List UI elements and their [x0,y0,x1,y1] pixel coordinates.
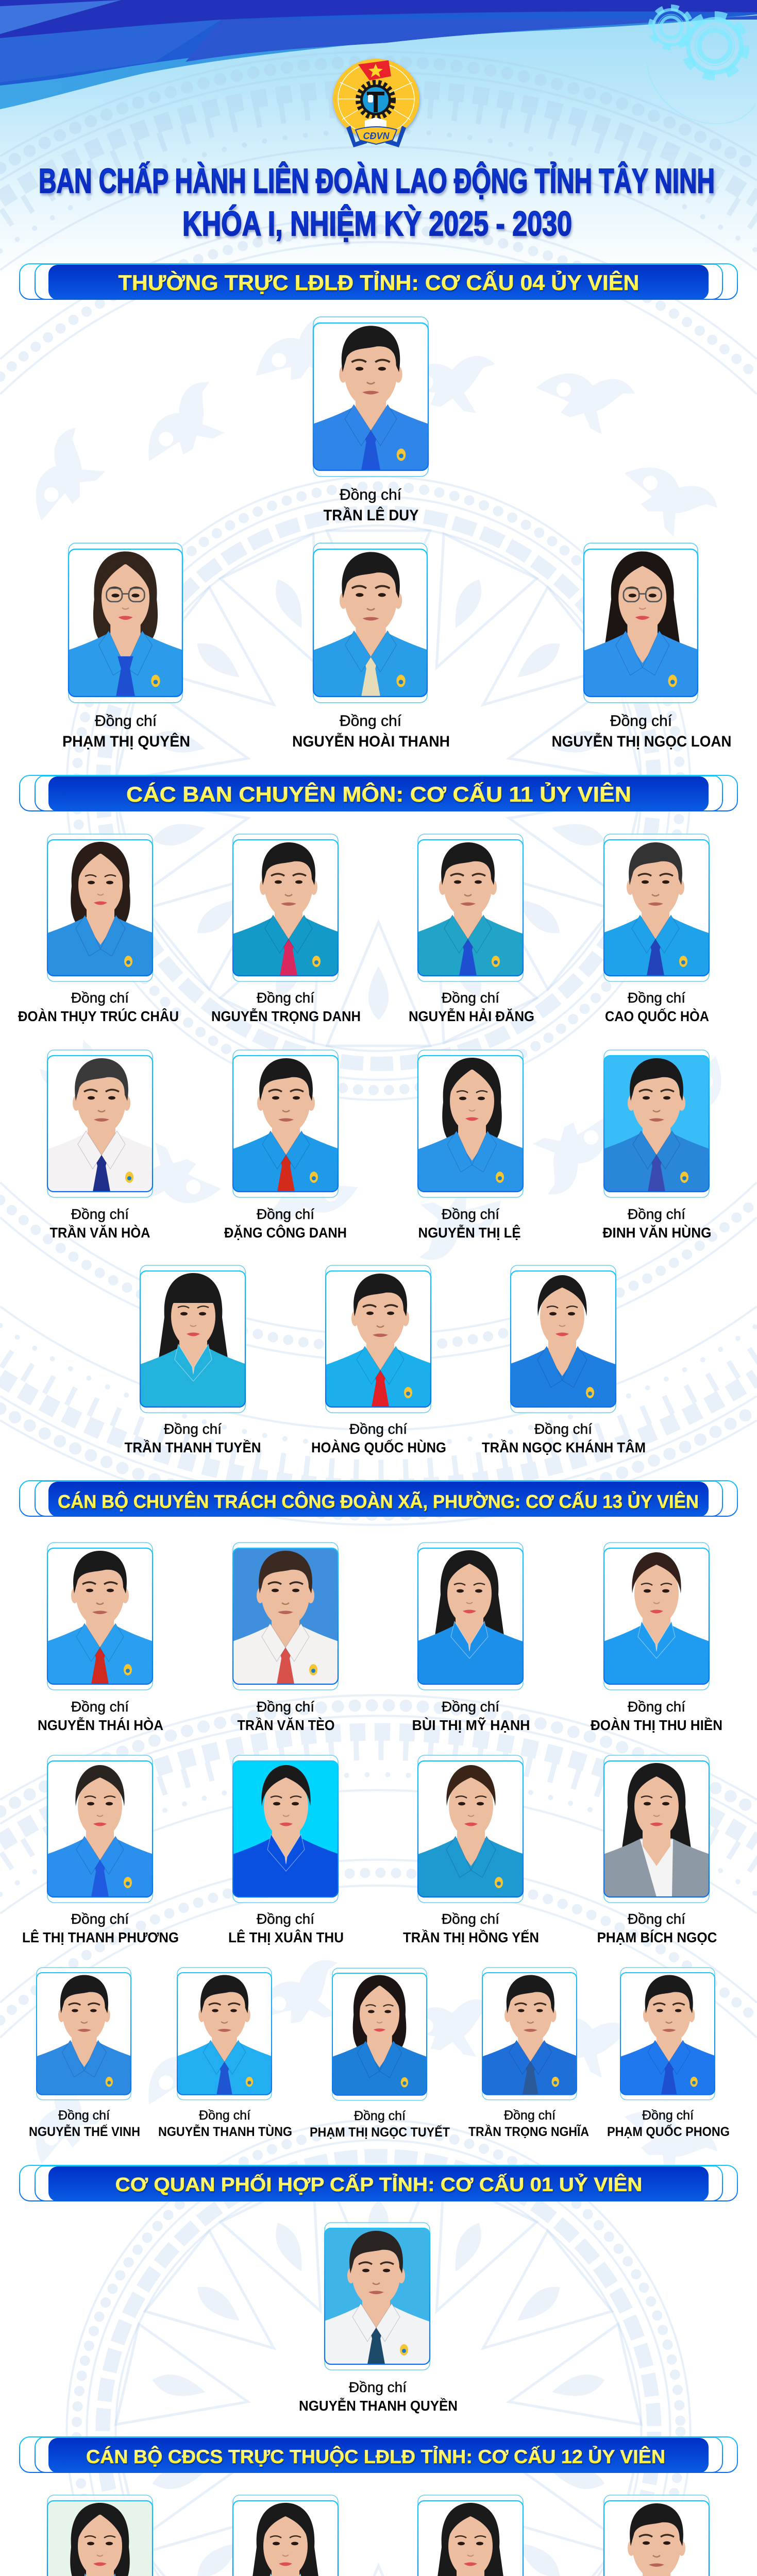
member: Phạm Quốc Phong: Đồng chí [642,2108,694,2123]
member: Bùi Thị Mỹ Hạnh: Đồng chí [442,1699,499,1715]
member: Phạm Thị Quyên [62,543,190,750]
member: Nguyễn Văn Khải [595,2495,719,2576]
member: Nguyễn Thanh Quyền [299,2223,458,2414]
member: Đoàn Thị Thu Hiền: Đồng chí [628,1699,685,1715]
member: Nguyễn Thị Ngọc Loan [551,543,732,750]
member: Trần Thanh Tuyền: Đồng chí [164,1421,222,1437]
member: Trần Văn Hòa: Đồng chí [71,1206,129,1222]
member: Đặng Công Danh: ĐẶNG CÔNG DANH [224,1224,347,1241]
member: Nguyễn Thế Vinh: NGUYỄN THẾ VINH [29,2124,140,2139]
section heading: Cán bộ chuyên trách công đoàn xã, phường [20,1480,737,1517]
member: Nguyễn Trọng Danh: Đồng chí [257,990,314,1006]
member: Nguyễn Thái Hòa: Đồng chí [71,1699,129,1715]
member: Cao Quốc Hòa: Đồng chí [628,990,685,1006]
member: Trần Trọng Nghĩa [468,1968,589,2139]
member: Nguyễn Thanh Tùng: Đồng chí [199,2108,250,2123]
member: Trần Thị Hồng Yến [403,1755,539,1945]
member: Đinh Văn Hùng [599,1050,714,1241]
member: Trần Ngọc Khánh Tâm: TRẦN NGỌC KHÁNH TÂM [482,1439,646,1455]
member: Hoàng Quốc Hùng: Đồng chí [349,1421,407,1437]
member: Hoàng Quốc Hùng [311,1265,446,1455]
member: Nguyễn Hoài Thanh: Đồng chí [340,713,402,730]
member: Lê Thị Thanh Phương [22,1755,179,1945]
member: Phạm Thị Ngọc Tuyết: Đồng chí [354,2109,406,2123]
member: Nguyễn Thế Vinh [29,1968,140,2139]
member: Nguyễn Trọng Danh: NGUYỄN TRỌNG DANH [211,1008,361,1024]
member: Nguyễn Thế Vinh: Đồng chí [58,2108,110,2123]
member: Trần Ngọc Khánh Tâm: Đồng chí [534,1421,592,1437]
member: Lê Thị Xuân Thu [228,1755,344,1945]
section heading: Cơ quan phối hợp cấp tỉnh: CƠ QUAN PHỐI HỢP CẤP TỈNH: CƠ CẤU 01 UỶ VIÊN [115,2173,642,2196]
member: Trần Trọng Nghĩa: TRẦN TRỌNG NGHĨA [468,2124,589,2139]
logo: Công đoàn Việt Nam: CĐVN [363,131,390,141]
member: Trần Thanh Tuyền: TRẦN THANH TUYỀN [125,1439,261,1455]
section heading: Thường trực [20,263,737,300]
member: Lê Thị Xuân Thu: Đồng chí [257,1911,314,1927]
member: Đoàn Thị Thu Hiền: ĐOÀN THỊ THU HIỀN [591,1717,722,1733]
title [39,162,715,243]
member: Nguyễn Thị Lệ: NGUYỄN THỊ LỆ [418,1225,520,1241]
member: Nguyễn Thanh Tùng [158,1968,292,2139]
section heading: Cán bộ CĐCS trực thuộc [20,2436,737,2473]
member: Bùi Thị Mỹ Hạnh [412,1543,530,1733]
member: Đoàn Thụy Trúc Châu: ĐOÀN THỤY TRÚC CHÂU [18,1008,179,1024]
member: Nguyễn Thanh Quyền: Đồng chí [349,2379,407,2395]
member: Trần Văn Tèo: Đồng chí [257,1699,314,1715]
title: KHÓA I, NHIỆM KỲ 2025 - 2030 [182,205,572,243]
logo: Công đoàn Việt Nam [333,59,419,147]
member: Trần Văn Tèo: TRẦN VĂN TÈO [237,1717,335,1733]
member: Hoàng Quốc Hùng: HOÀNG QUỐC HÙNG [311,1439,446,1455]
member: Đoàn Thụy Trúc Châu: Đồng chí [71,990,129,1006]
member: Phan Thị Thu Hiền [405,2495,537,2576]
member: Phạm Thị Ngọc Tuyết: PHẠM THỊ NGỌC TUYẾT [310,2125,450,2140]
member: Trần Lê Duy [308,317,434,524]
member: Trần Lê Duy: TRẦN LÊ DUY [324,506,418,524]
member: Lê Thị Thanh Phương: Đồng chí [71,1911,129,1927]
member: Cao Quốc Hòa [598,834,713,1024]
member: Trần Văn Hòa [44,1050,159,1241]
member: Trần Thị Hồng Yến: TRẦN THỊ HỒNG YẾN [403,1929,539,1945]
member: Trần Thị Hồng Yến: Đồng chí [442,1911,499,1927]
member: Bùi Thị Mỹ Hạnh: BÙI THỊ MỸ HẠNH [412,1717,530,1733]
member: Phạm Thị Ngọc Tuyết [310,1968,450,2140]
member: Phạm Thị Quyên: Đồng chí [95,713,157,730]
section heading: Các ban chuyên môn: CÁC BAN CHUYÊN MÔN: CƠ CẤU 11 ỦY VIÊN [126,782,631,806]
member: Đặng Công Danh: Đồng chí [257,1206,314,1222]
member: Nguyễn Hải Đăng: NGUYỄN HẢI ĐĂNG [409,1008,534,1024]
member: Phạm Thị Quyên: PHẠM THỊ QUYÊN [62,733,190,750]
member: Lê Thị Thanh Phương: LÊ THỊ THANH PHƯƠNG [22,1929,179,1945]
member: Phạm Bích Ngọc: Đồng chí [628,1911,685,1927]
member: Cao Quốc Hòa: CAO QUỐC HÒA [605,1008,709,1024]
member: Đoàn Thị Thu Hiền [591,1543,722,1733]
member: Đặng Công Danh [224,1050,347,1241]
member: Phạm Bích Ngọc [597,1755,717,1945]
member: Trần Văn Hòa: TRẦN VĂN HÒA [49,1225,150,1241]
member: Lê Thị Xuân Thu: LÊ THỊ XUÂN THU [228,1929,344,1945]
member: Trần Thanh Tuyền [125,1265,261,1455]
icon: gears top right [647,8,755,124]
member: Nguyễn Thị Ngọc Loan: Đồng chí [610,713,672,730]
member: Nguyễn Trọng Danh [211,834,361,1024]
member: Lê Thị Trang Kim Dung [204,2495,368,2576]
member: Nguyễn Thái Hòa: NGUYỄN THÁI HÒA [38,1717,163,1733]
member: Phạm Bích Ngọc: PHẠM BÍCH NGỌC [597,1929,717,1945]
member: Nguyễn Hoài Thanh: NGUYỄN HOÀI THANH [292,733,450,750]
member: Đoàn Thụy Trúc Châu [18,834,179,1024]
member: Trần Trọng Nghĩa: Đồng chí [504,2108,556,2123]
member: Trần Lê Duy: Đồng chí [340,486,402,503]
member: Trần Ngọc Khánh Tâm [482,1265,646,1455]
member: Nguyễn Thị Ngọc Loan: NGUYỄN THỊ NGỌC LOAN [551,733,732,750]
member: Nguyễn Hải Đăng [409,834,534,1024]
member: Nguyễn Thị Lệ: Đồng chí [442,1206,499,1222]
section heading: Các ban chuyên môn [20,775,737,811]
member: Phạm Quốc Phong: PHẠM QUỐC PHONG [607,2124,730,2139]
section heading: Cơ quan phối hợp cấp tỉnh [20,2165,737,2201]
member: Nguyễn Thanh Quyền: NGUYỄN THANH QUYỀN [299,2398,458,2414]
member: Nguyễn Hải Đăng: Đồng chí [442,990,499,1006]
member: Nguyễn Thị Lệ [414,1050,530,1241]
header wave [0,0,757,109]
member: Nguyễn Thị Lệ Chi [36,2495,165,2576]
member: Nguyễn Thái Hòa [38,1543,163,1733]
member: Nguyễn Hoài Thanh [292,543,450,750]
section heading: Thường trực: THƯỜNG TRỰC LĐLĐ TỈNH: CƠ CẤU 04 ỦY VIÊN [119,270,639,295]
member: Trần Văn Tèo [228,1543,343,1733]
member: Đinh Văn Hùng: ĐINH VĂN HÙNG [603,1225,711,1241]
section heading: Cán bộ CĐCS trực thuộc: CÁN BỘ CĐCS TRỰC THUỘC LĐLĐ TỈNH: CƠ CẤU 12 ỦY VIÊN [86,2446,665,2467]
member: Phạm Quốc Phong [607,1968,730,2139]
member: Nguyễn Thanh Tùng: NGUYỄN THANH TÙNG [158,2124,292,2139]
member: Đinh Văn Hùng: Đồng chí [628,1206,685,1222]
section heading: Cán bộ chuyên trách công đoàn xã, phường: CÁN BỘ CHUYÊN TRÁCH CÔNG ĐOÀN XÃ, PHƯỜNG: CƠ CẤU 13 ỦY VIÊN [58,1490,699,1512]
